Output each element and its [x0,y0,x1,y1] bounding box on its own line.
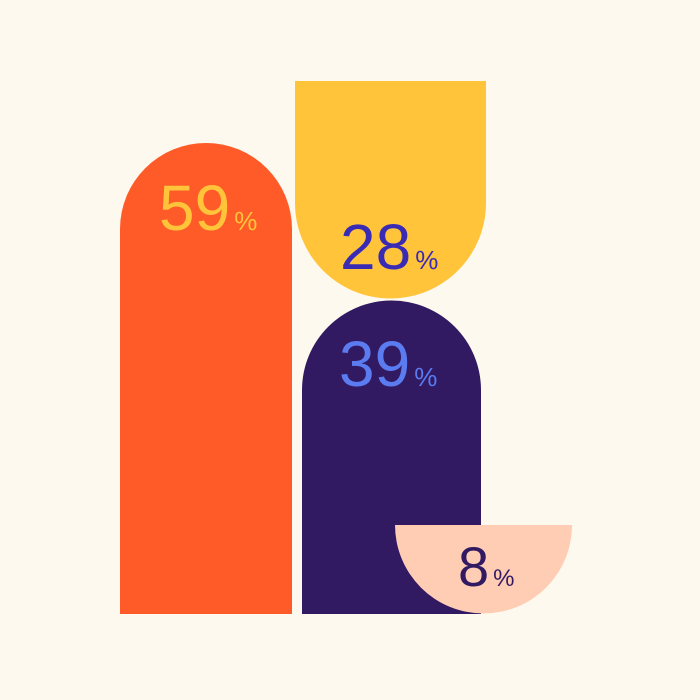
bar: purple 39% [302,301,481,614]
label: 39%: 39% [339,328,437,400]
bowl: peach 8% [395,525,572,614]
label: 59%: 59% [159,172,257,244]
label: 8%: 8% [458,535,514,598]
label: 28%: 28% [340,211,438,283]
bar: yellow 28% [295,81,486,298]
bar: orange 59% [120,143,292,614]
